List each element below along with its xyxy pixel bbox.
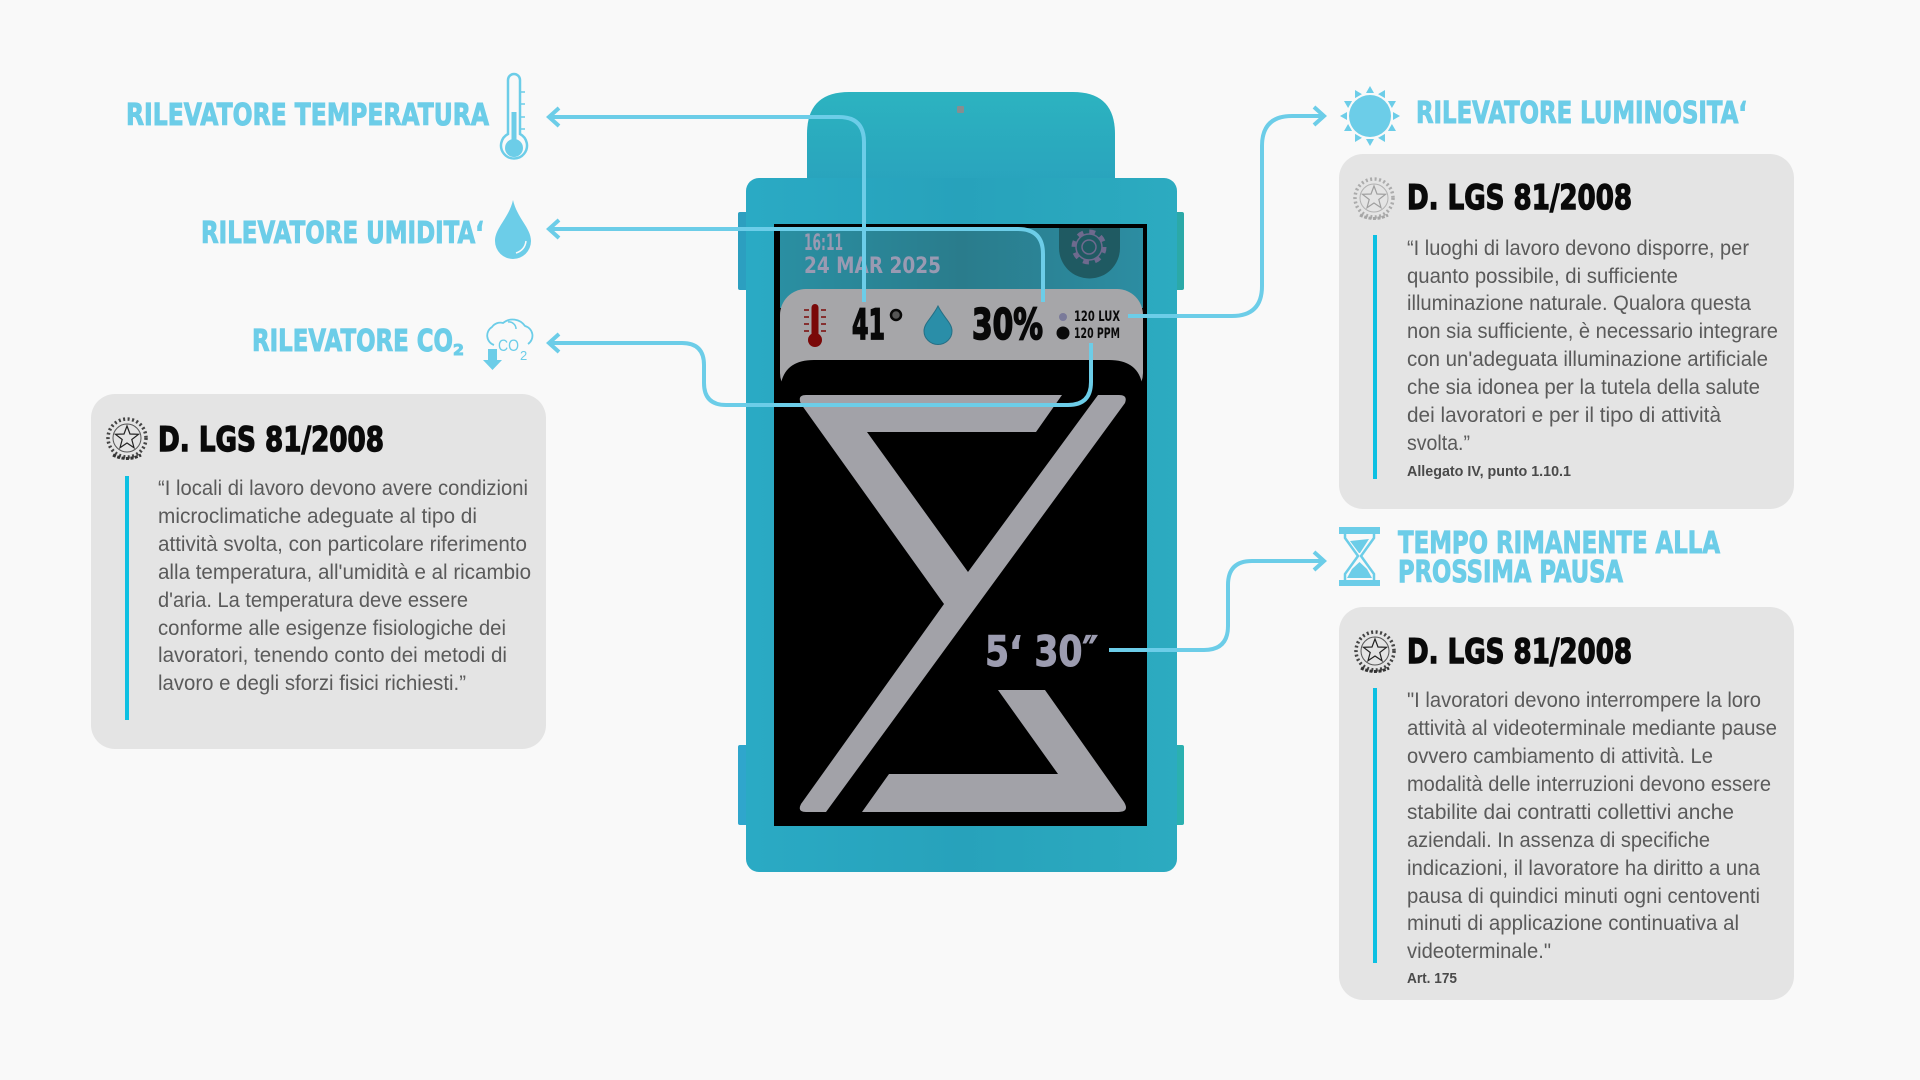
quote text: lavoratori, tenendo conto dei metodi di — [158, 644, 507, 667]
settings notch with gear — [1059, 228, 1120, 278]
quote text: videoterminale." — [1407, 940, 1551, 963]
heading: D. LGS 81/2008 — [1407, 178, 1632, 218]
heading: D. LGS 81/2008 — [158, 420, 384, 460]
temperature value: 41 — [852, 300, 885, 349]
connector: break time — [1109, 552, 1324, 650]
countdown value: 5‘ 30″ — [985, 627, 1098, 676]
quote text: svolta.” — [1407, 432, 1470, 455]
icon: CO2 cloud: 2 — [520, 348, 527, 363]
hourglass logo — [800, 395, 1126, 812]
quote text: minuti di applicazione continuativa al — [1407, 912, 1739, 935]
ppm reading: 120 PPM — [1074, 326, 1120, 342]
connector: humidity — [549, 220, 1043, 302]
panel: temperature law — [91, 394, 546, 749]
icon: water drop — [495, 200, 531, 259]
icon: CO2 cloud: CO — [498, 336, 519, 355]
icon: humidity drop — [924, 306, 952, 344]
quote text: attività al videoterminale mediante pause — [1407, 717, 1777, 740]
quote text: ovvero cambiamento di attività. Le — [1407, 745, 1713, 768]
quote text — [1407, 689, 1777, 963]
quote text: alla temperatura, all'umidità e al ricambio — [158, 561, 531, 584]
quote text: non sia sufficiente, è necessario integrare — [1407, 320, 1778, 343]
icon: sun — [1340, 86, 1400, 146]
screen — [774, 224, 1147, 826]
label: time to next break: TEMPO RIMANENTE ALLA — [1398, 526, 1721, 561]
citation: Allegato IV, punto 1.10.1 — [1407, 463, 1571, 480]
icon: hourglass — [1339, 527, 1380, 586]
connector: temperature — [549, 108, 864, 302]
quote text — [1407, 237, 1778, 455]
quote text: dei lavoratori e per il tipo di attività — [1407, 404, 1721, 427]
quote text: microclimatiche adeguate al tipo di — [158, 505, 477, 528]
humidity value: 30% — [972, 300, 1043, 349]
label: humidity: RILEVATORE UMIDITA‘ — [201, 216, 484, 251]
quote text: che sia idonea per la tutela della salute — [1407, 376, 1760, 399]
panel: break law — [1339, 607, 1794, 1000]
quote text — [158, 477, 531, 695]
label: time to next break — [1398, 526, 1721, 590]
label: time to next break: PROSSIMA PAUSA — [1398, 555, 1624, 590]
quote text: con un'adeguata illuminazione artificiale — [1407, 348, 1768, 371]
quote text: pausa di quindici minuti ogni centoventi — [1407, 885, 1760, 908]
accent bar — [125, 476, 129, 720]
icon: emblem — [1356, 632, 1394, 672]
side buttons — [738, 212, 1184, 825]
camera dot — [957, 106, 964, 113]
panel: lighting law — [1339, 154, 1794, 509]
quote text: attività svolta, con particolare riferimento — [158, 533, 527, 556]
label: CO2: RILEVATORE CO — [252, 324, 453, 359]
heading: D. LGS 81/2008 — [1407, 632, 1632, 672]
label: CO2: 2 — [453, 341, 464, 359]
quote text: quanto possibile, di sufficiente — [1407, 265, 1678, 288]
quote text: conforme alle esigenze fisiologiche dei — [158, 617, 506, 640]
label: temperature: RILEVATORE TEMPERATURA — [126, 98, 490, 133]
accent bar — [1373, 235, 1377, 479]
ppm reading — [1056, 326, 1120, 342]
quote text: “I locali di lavoro devono avere condizioni — [158, 477, 528, 500]
sensor widget — [780, 289, 1143, 399]
quote text: modalità delle interruzioni devono essere — [1407, 773, 1771, 796]
connector: CO2 — [549, 334, 1091, 405]
black lower panel — [780, 360, 1143, 826]
clock time: 16:11 — [804, 231, 843, 256]
icon: thermometer — [501, 74, 527, 159]
quote text: indicazioni, il lavoratore ha diritto a una — [1407, 857, 1760, 880]
degree mark — [891, 310, 901, 320]
icon: red thermometer — [804, 304, 826, 347]
icon: emblem — [108, 419, 146, 458]
quote text: stabilite dai contratti collettivi anche — [1407, 801, 1734, 824]
lux reading: 120 LUX — [1074, 309, 1120, 325]
quote text: illuminazione naturale. Qualora questa — [1407, 292, 1751, 315]
connector: luminosity — [1128, 107, 1324, 316]
icon: CO2 cloud — [483, 319, 532, 370]
quote text: “I luoghi di lavoro devono disporre, per — [1407, 237, 1749, 260]
quote text: "I lavoratori devono interrompere la loro — [1407, 689, 1761, 712]
device body — [746, 178, 1177, 872]
icon: emblem faded — [1355, 179, 1393, 218]
device — [738, 92, 1184, 872]
accent bar — [1373, 688, 1377, 963]
top tab — [807, 92, 1115, 185]
citation: Art. 175 — [1407, 970, 1457, 987]
lux reading — [1059, 309, 1120, 325]
quote text: lavoro e degli sforzi fisici richiesti.” — [158, 672, 466, 695]
date: 24 MAR 2025 — [804, 254, 941, 279]
label: luminosity: RILEVATORE LUMINOSITA‘ — [1416, 96, 1747, 131]
quote text: aziendali. In assenza di specifiche — [1407, 829, 1710, 852]
quote text: d'aria. La temperatura deve essere — [158, 589, 468, 612]
